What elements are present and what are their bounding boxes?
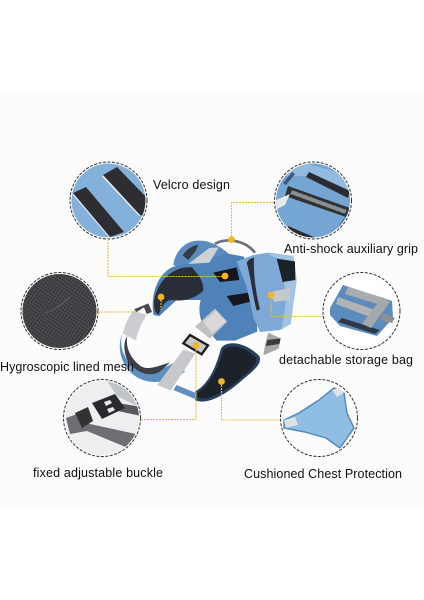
callout: Anti-shock auxiliary grip <box>274 162 418 256</box>
leader line: grip <box>228 202 274 243</box>
left grey strap <box>123 311 147 341</box>
label: Anti-shock auxiliary grip <box>284 242 418 256</box>
white disc <box>324 273 400 349</box>
detail photo: velcro strips <box>70 162 148 240</box>
front grey tab <box>195 309 227 339</box>
callout: Velcro design <box>70 162 230 240</box>
infographic canvas <box>1 162 418 480</box>
detail photo: mesh <box>21 272 99 350</box>
dashed ring <box>323 272 400 350</box>
label: fixed adjustable buckle <box>33 466 163 480</box>
left chest strap padding <box>120 333 185 382</box>
background band <box>0 90 424 510</box>
grab handle <box>215 240 255 253</box>
central harness product <box>120 240 297 402</box>
detail photo: buckle <box>63 379 141 457</box>
back velcro strips <box>213 267 239 282</box>
label: Hygroscopic lined mesh <box>0 360 134 374</box>
leader line: storage bag <box>268 292 323 316</box>
callout: Hygroscopic lined mesh <box>0 272 134 374</box>
label: detachable storage bag <box>279 353 413 367</box>
dashed ring <box>64 380 140 456</box>
detail photo: chest pad <box>284 388 354 448</box>
callout: fixed adjustable buckle <box>33 379 163 480</box>
detail photo: grip <box>274 162 352 240</box>
left small buckle <box>134 303 152 314</box>
dashed ring <box>70 162 147 239</box>
main body <box>153 253 257 341</box>
detail photo: storage bag <box>330 285 395 336</box>
white shoulder strap <box>188 247 219 264</box>
dashed ring <box>21 272 98 350</box>
dashed ring <box>280 380 358 456</box>
callout: Cushioned Chest Protection <box>244 380 402 481</box>
dark inner lining <box>154 267 203 315</box>
label: Cushioned Chest Protection <box>244 467 402 481</box>
saddle pack <box>237 253 297 332</box>
leader line: chest <box>218 378 280 420</box>
label: Velcro design <box>153 178 230 192</box>
strap buckle <box>183 335 208 354</box>
chest strap <box>157 349 195 391</box>
chest plate <box>195 343 260 402</box>
rear shoulder bump <box>173 241 228 270</box>
leader line: velcro <box>108 239 228 279</box>
dashed ring <box>274 162 352 239</box>
leader line: mesh <box>98 294 164 312</box>
leader line: buckle <box>141 342 199 420</box>
right side buckle <box>263 333 281 355</box>
callout: detachable storage bag <box>279 272 413 367</box>
